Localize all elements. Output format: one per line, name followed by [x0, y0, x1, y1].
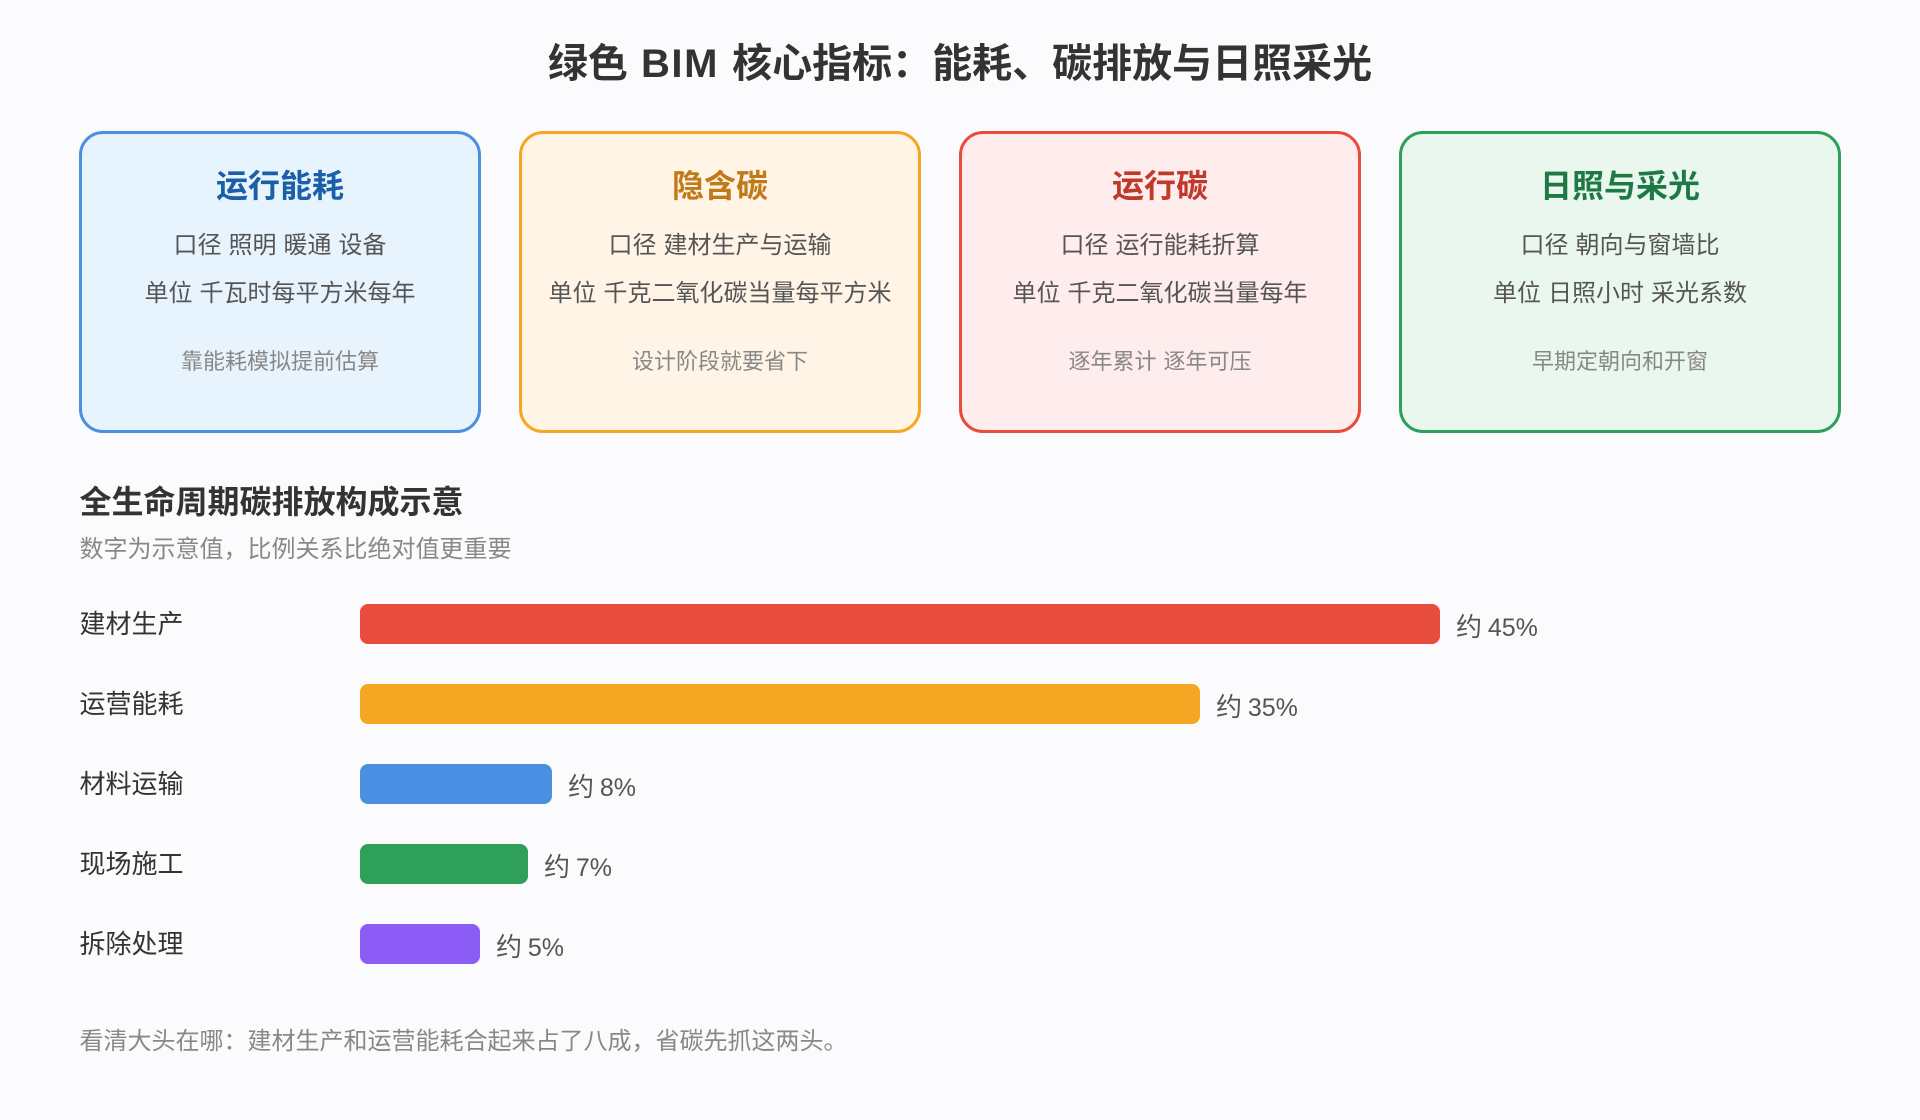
row: 拆除处理: 拆除处理	[80, 924, 184, 961]
scope line: 口径 建材生产与运输	[608, 225, 831, 260]
row: 材料运输: 材料运输	[80, 764, 184, 801]
panel: 隐含碳	[519, 131, 921, 433]
row: 现场施工	[80, 844, 612, 884]
scope line: 口径 照明 暖通 设备	[174, 225, 386, 260]
scope line: 口径 运行能耗折算	[1060, 225, 1259, 260]
row: 现场施工: 现场施工	[80, 844, 184, 881]
note: 设计阶段就要省下	[632, 344, 808, 376]
panel: 运行能耗	[79, 131, 481, 433]
card heading: 隐含碳	[672, 161, 768, 207]
unit line: 单位 千瓦时每平方米每年	[144, 273, 415, 308]
panel: 日照与采光	[1399, 131, 1841, 433]
note: 逐年累计 逐年可压	[1069, 344, 1251, 376]
note: 早期定朝向和开窗	[1532, 344, 1708, 376]
footer takeaway: 看清大头在哪：建材生产和运营能耗合起来占了八成，省碳先抓这两头。	[80, 1021, 848, 1056]
card heading: 日照与采光	[1540, 161, 1700, 207]
row: 现场施工: 约 7%	[544, 847, 612, 884]
title: 绿色 BIM 核心指标：能耗、碳排放与日照采光	[548, 31, 1372, 89]
row: 运营能耗: 运营能耗	[80, 684, 184, 721]
row: 材料运输	[80, 764, 636, 804]
note: 靠能耗模拟提前估算	[181, 344, 379, 376]
section heading: 全生命周期碳排放构成示意	[80, 477, 464, 523]
row: 运营能耗	[80, 684, 1298, 724]
row: 建材生产: 约 45%	[1456, 607, 1538, 644]
row: 运营能耗: 约 35%	[1216, 687, 1298, 724]
row: 材料运输: 约 8%	[568, 767, 636, 804]
row: 拆除处理	[80, 924, 564, 964]
row: 拆除处理: 约 5%	[496, 927, 564, 964]
card heading: 运行能耗	[216, 161, 344, 207]
panel: 运行碳	[959, 131, 1361, 433]
card heading: 运行碳	[1112, 161, 1208, 207]
scope line: 口径 朝向与窗墙比	[1520, 225, 1719, 260]
unit line: 单位 日照小时 采光系数	[1493, 273, 1747, 308]
bar chart	[80, 604, 1538, 964]
unit line: 单位 千克二氧化碳当量每平方米	[548, 273, 891, 308]
section subtitle: 数字为示意值，比例关系比绝对值更重要	[80, 529, 512, 564]
unit line: 单位 千克二氧化碳当量每年	[1012, 273, 1307, 308]
row: 建材生产: 建材生产	[80, 604, 184, 641]
row: 建材生产	[80, 604, 1538, 644]
